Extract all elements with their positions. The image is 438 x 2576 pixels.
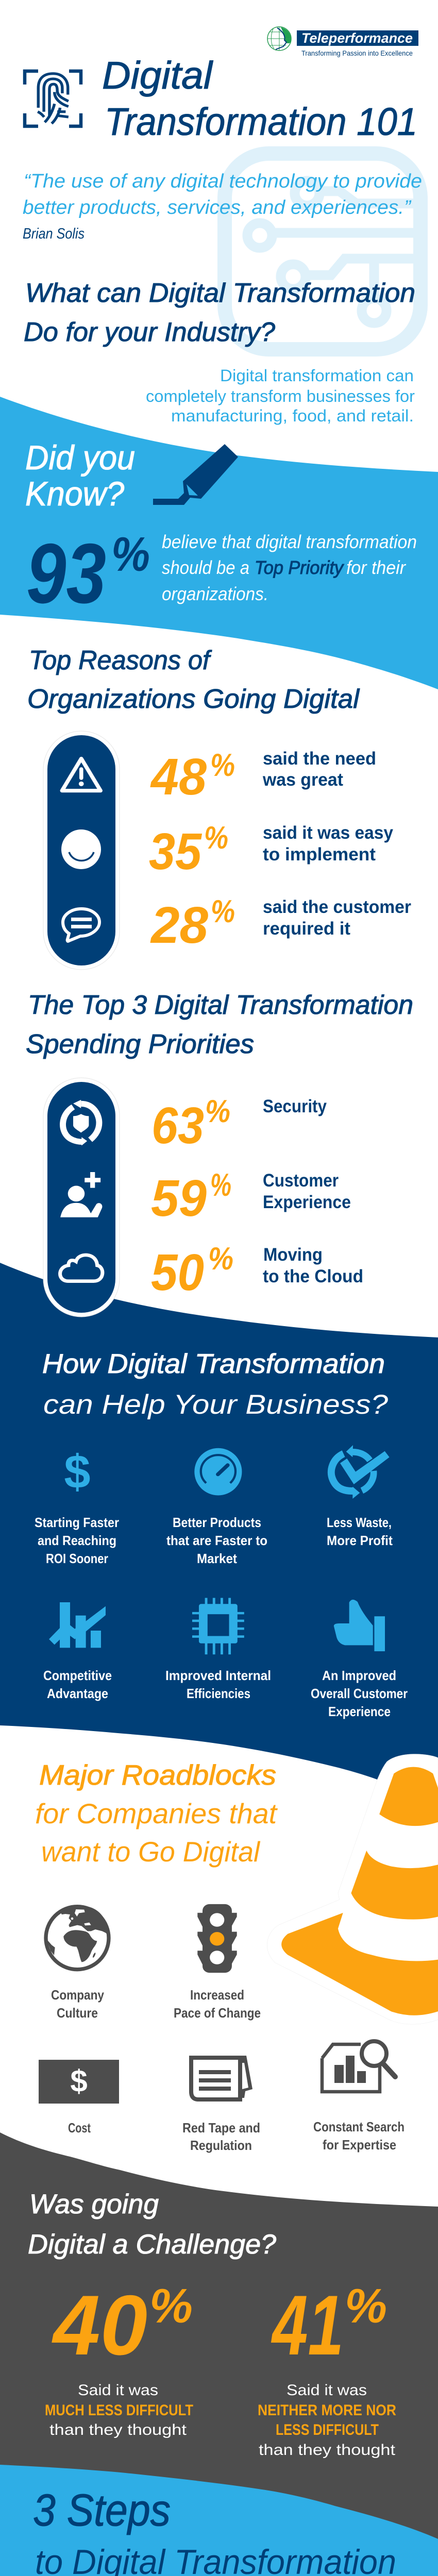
label: company culture — [51, 1987, 104, 2021]
heading: spending priorities — [26, 990, 413, 1059]
heading: what can digital transformation do: What can Digital Transformation — [25, 278, 415, 308]
text: need was great: said the need — [263, 749, 376, 769]
text: easy to implement: to implement — [263, 844, 376, 865]
logo: Teleperformance header — [267, 27, 418, 57]
heading: major roadblocks: want to Go Digital — [41, 1836, 261, 1868]
label: less waste — [327, 1515, 393, 1548]
heading: challenge: Digital a Challenge? — [28, 2229, 277, 2260]
label: competitive advantage — [43, 1668, 112, 1701]
label: better products: Better Products — [173, 1515, 261, 1530]
icon: cost banknote — [39, 2060, 119, 2104]
label: pace of change — [174, 1987, 261, 2021]
stat: 93%: % — [111, 527, 150, 581]
text: moving to the cloud: Moving — [263, 1245, 323, 1265]
label: constant search: Constant Search — [313, 2119, 405, 2134]
icon: gauge — [194, 1448, 242, 1496]
title: Digital — [102, 54, 213, 97]
heading: top reasons: Top Reasons of — [29, 646, 212, 675]
stat: 41%: 41 — [271, 2278, 344, 2372]
quote — [23, 171, 422, 242]
icon: bar chart with arrow — [49, 1602, 106, 1648]
heading: how digital transformation can help — [42, 1349, 389, 1420]
label: company culture: Company — [51, 1987, 104, 2003]
panel: how digital transformation can help — [0, 1263, 438, 1806]
text: much less difficult: Said it was — [78, 2382, 158, 2399]
icon: person with plus — [60, 1172, 102, 1217]
logo: Teleperformance header: Transforming Passion into Excellence — [301, 49, 413, 57]
stat: 50% — [151, 1241, 233, 1301]
label: overall customer experience: Overall Customer — [311, 1686, 408, 1701]
label: starting faster: ROI Sooner — [46, 1551, 108, 1566]
icon: globe — [46, 1906, 109, 1970]
text: much less difficult — [45, 2382, 193, 2438]
pill: top reasons icons — [43, 731, 120, 970]
watermark: circuit icon — [225, 154, 420, 349]
icon: smile — [61, 829, 101, 869]
icon: report with magnifier — [322, 2041, 395, 2092]
text: moving to the cloud — [263, 1245, 363, 1286]
text: need was great — [262, 749, 376, 790]
stat: 48%: % — [210, 748, 235, 783]
heading: major roadblocks: Major Roadblocks — [39, 1759, 276, 1791]
text: need was great: was great — [262, 770, 343, 790]
stat: 50%: 50 — [151, 1244, 204, 1301]
text: customer experience — [263, 1171, 351, 1212]
stat: 41%: % — [345, 2279, 387, 2333]
label: constant search: for Expertise — [323, 2137, 396, 2153]
heading: how digital transformation can help: How Digital Transformation — [42, 1349, 385, 1379]
text: 93% explanation: for their — [346, 557, 407, 578]
text: 93% explanation: should be a — [162, 557, 249, 578]
label: less waste: More Profit — [327, 1533, 393, 1548]
label: constant search — [313, 2119, 405, 2153]
icon: thumbs up — [334, 1600, 385, 1651]
heading: did you know: Know? — [25, 474, 124, 513]
stat: 28%: 28 — [150, 896, 208, 954]
quote: “The use of any digital technology to provide — [24, 171, 422, 192]
label: pace of change: Increased — [190, 1987, 244, 2003]
stat: 40% — [52, 2278, 193, 2372]
label: red tape — [182, 2120, 260, 2153]
icon: traffic light — [197, 1904, 237, 1973]
icon: check with arrows — [331, 1445, 390, 1499]
text: easy to implement: said it was easy — [263, 823, 394, 843]
text: customer experience: Experience — [263, 1192, 351, 1212]
label: competitive advantage: Competitive — [43, 1668, 112, 1683]
text: customer required it: said the customer — [263, 897, 411, 917]
text: neither more nor less: NEITHER MORE NOR — [258, 2402, 396, 2419]
heading: did you know: Did you — [25, 438, 135, 477]
text: 93% explanation: believe that digital transformation — [162, 531, 417, 552]
text: customer required it — [263, 897, 411, 939]
icon: shield with arrows — [63, 1100, 99, 1145]
stat: 35%: 35 — [149, 823, 202, 880]
icon: fingerprint in brackets — [25, 71, 81, 126]
label: better products — [166, 1515, 267, 1566]
intro text — [146, 366, 415, 425]
intro text: Digital transformation can — [220, 366, 414, 385]
stat: 35% — [149, 820, 228, 880]
quote attribution: Brian Solis — [23, 226, 85, 242]
stat: 93%: 93 — [26, 526, 106, 621]
label: internal efficiencies: Improved Internal — [165, 1668, 271, 1683]
heading: top reasons: Organizations Going Digital — [27, 684, 360, 714]
label: internal efficiencies: Efficiencies — [187, 1686, 250, 1701]
text: much less difficult: MUCH LESS DIFFICULT — [45, 2402, 193, 2419]
stat: 28% — [150, 894, 235, 954]
text: easy to implement — [263, 823, 394, 865]
stat: 50%: % — [208, 1241, 233, 1277]
stat: 40%: % — [149, 2279, 193, 2333]
quote: better products, services, and experiences.” — [23, 197, 412, 218]
logo: Teleperformance header: Teleperformance — [301, 30, 413, 46]
heading: 3 steps — [33, 2485, 396, 2576]
title: Transformation 101 — [105, 100, 417, 143]
label: starting faster — [35, 1515, 119, 1566]
icon: cloud — [60, 1255, 103, 1281]
label: better products: Market — [197, 1551, 237, 1566]
heading: top reasons — [27, 646, 360, 714]
stat: 48% — [150, 748, 235, 806]
label: internal efficiencies — [165, 1668, 271, 1701]
text: moving to the cloud: to the Cloud — [263, 1266, 363, 1286]
heading: major roadblocks — [35, 1759, 278, 1868]
stat: 59%: 59 — [151, 1170, 207, 1227]
heading: challenge — [28, 2189, 277, 2260]
text: 93% explanation: organizations. — [162, 583, 268, 604]
icon: chip — [192, 1598, 244, 1654]
text: much less difficult: than they thought — [49, 2421, 187, 2438]
text: neither more nor less: than they thought — [259, 2442, 396, 2459]
heading: how digital transformation can help: can Help Your Business? — [43, 1389, 389, 1420]
pill: spending priorities icons — [43, 1078, 120, 1317]
text: customer experience: Customer — [263, 1171, 339, 1191]
stat: 63%: 63 — [151, 1097, 204, 1155]
label: less waste: Less Waste, — [327, 1515, 392, 1530]
title — [102, 54, 417, 143]
label: cost: Cost — [68, 2120, 91, 2136]
label: overall customer experience: Experience — [328, 1704, 391, 1719]
panel: was going digital a challenge — [0, 2132, 438, 2545]
intro text: completely transform businesses for — [146, 387, 415, 405]
heading: what can digital transformation do: Do for your Industry? — [24, 317, 275, 347]
stat: 48%: 48 — [150, 748, 207, 806]
stat: 59%: % — [210, 1167, 231, 1203]
text: customer required it: required it — [263, 919, 350, 939]
panel: 3 steps — [0, 2465, 438, 2576]
label: overall customer experience: An Improved — [322, 1668, 396, 1683]
text: 93% explanation — [162, 531, 417, 604]
heading: 3 steps: 3 Steps — [33, 2485, 171, 2535]
heading: did you know — [25, 438, 135, 513]
label: red tape: Red Tape and — [182, 2120, 260, 2136]
heading: spending priorities: The Top 3 Digital Transformation — [28, 990, 413, 1020]
heading: major roadblocks: for Companies that — [35, 1798, 278, 1829]
text: 93% explanation: Top Priority — [255, 557, 344, 578]
text: neither more nor less: LESS DIFFICULT — [276, 2421, 379, 2438]
heading: what can digital transformation do — [24, 278, 415, 347]
heading: spending priorities: Spending Priorities — [26, 1029, 254, 1059]
icon: dollar: $ — [64, 1446, 91, 1498]
stat: 63% — [151, 1094, 230, 1155]
icon: highlighter — [153, 444, 238, 505]
icon: document — [191, 2056, 252, 2099]
label: better products: that are Faster to — [166, 1533, 267, 1548]
label: red tape: Regulation — [190, 2138, 252, 2153]
heading: challenge: Was going — [29, 2189, 159, 2219]
text: neither more nor less — [258, 2382, 396, 2459]
intro text: manufacturing, food, and retail. — [171, 406, 414, 425]
label: company culture: Culture — [57, 2005, 98, 2021]
icon: traffic cone — [267, 1754, 438, 2024]
icon: cost banknote: $ — [70, 2064, 88, 2098]
label: pace of change: Pace of Change — [174, 2005, 261, 2021]
label: competitive advantage: Advantage — [47, 1686, 108, 1701]
stat: 40%: 40 — [52, 2278, 147, 2372]
label: starting faster: and Reaching — [38, 1533, 116, 1548]
stat: 28%: % — [211, 894, 235, 929]
label: overall customer experience — [311, 1668, 408, 1719]
text: security: Security — [263, 1096, 327, 1116]
stat: 35%: % — [204, 820, 228, 856]
text: neither more nor less: Said it was — [287, 2382, 367, 2399]
panel: did you know — [0, 397, 438, 689]
stat: 59% — [151, 1167, 231, 1227]
stat: 63%: % — [205, 1094, 230, 1129]
icon: warning — [62, 758, 100, 791]
label: starting faster: Starting Faster — [35, 1515, 119, 1530]
icon: speech bubble — [63, 909, 99, 941]
